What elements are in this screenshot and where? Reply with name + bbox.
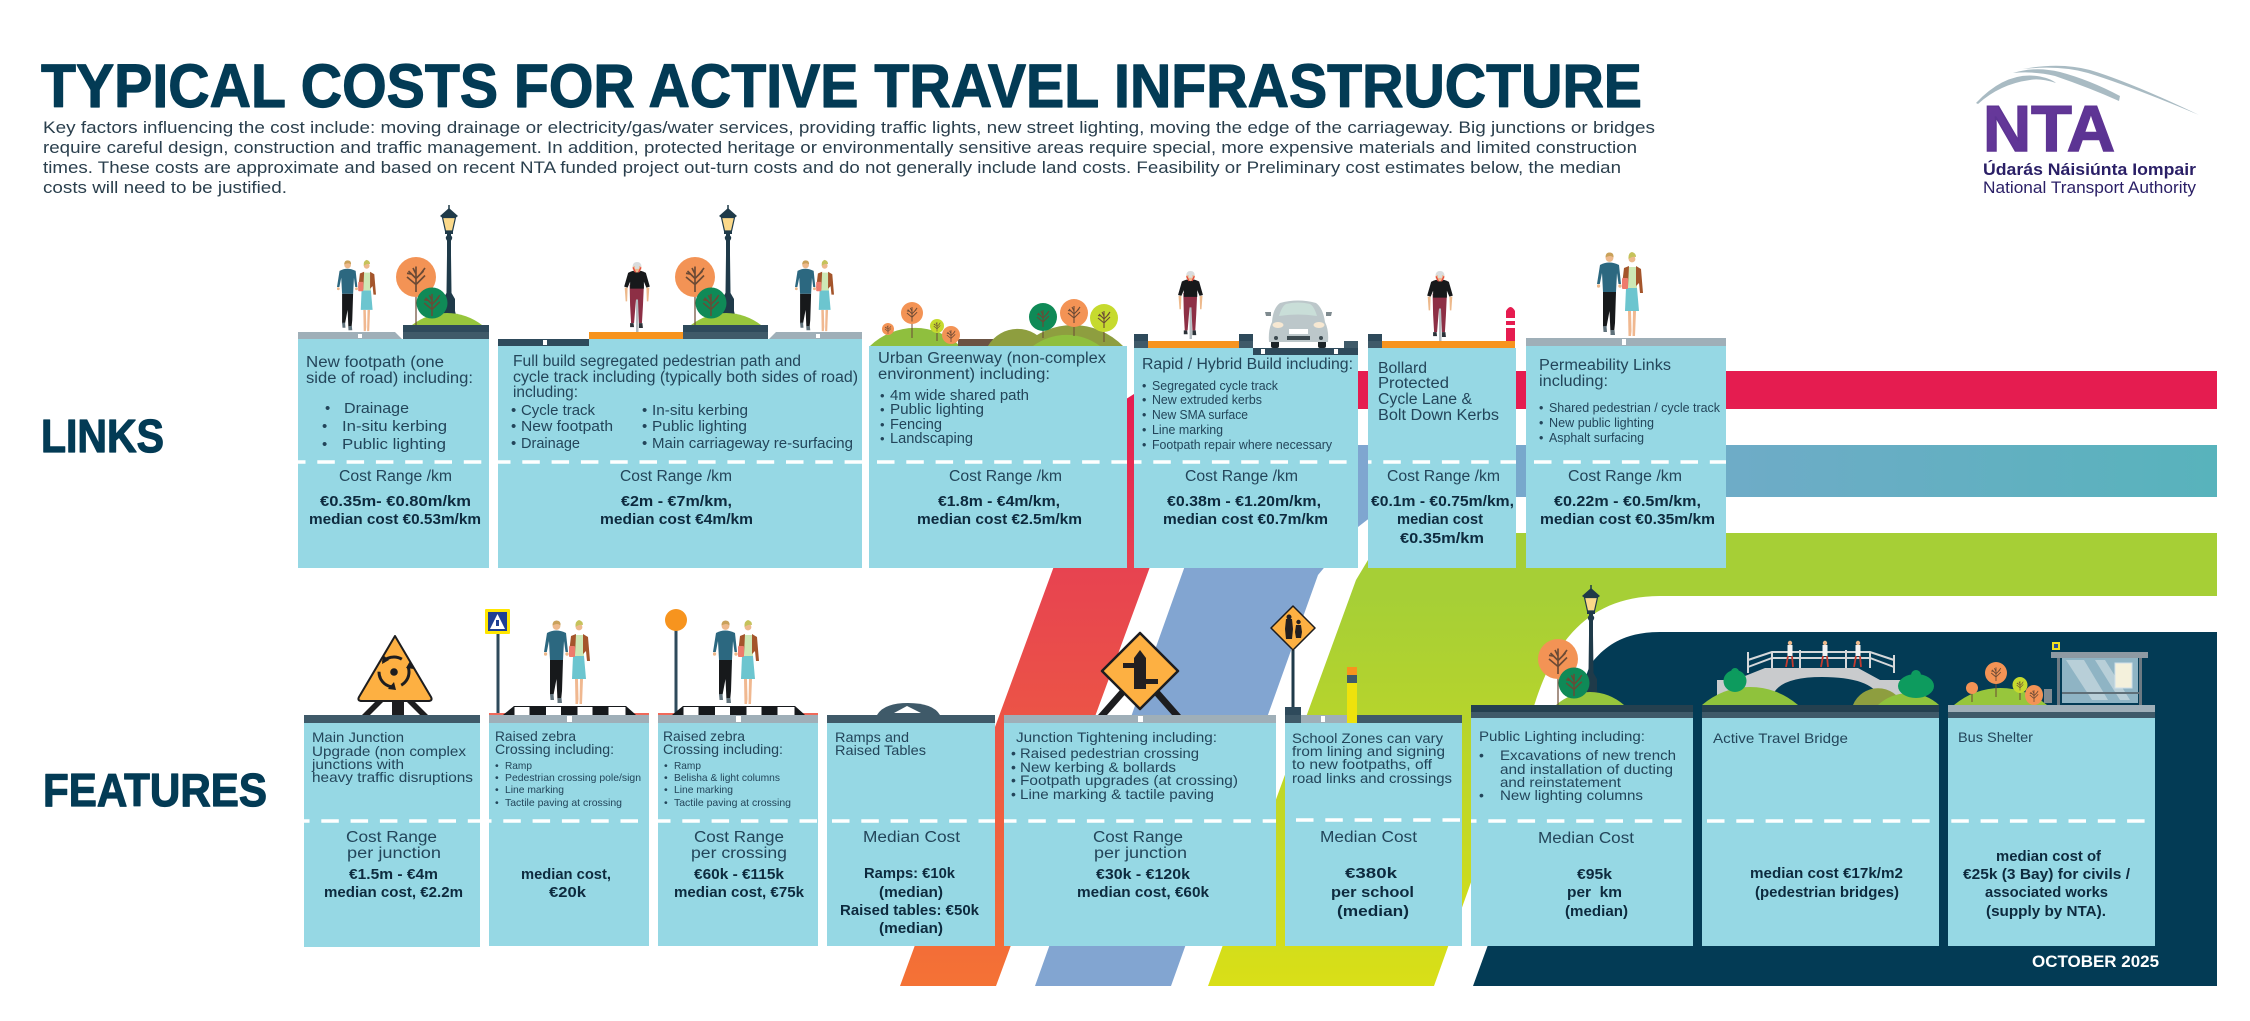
description: Bollard [1378, 360, 1427, 377]
description: Crossing including: [495, 741, 614, 757]
description: Line marking & tactile paving [1020, 786, 1214, 802]
cost: (supply by NTA). [1986, 903, 2106, 920]
description: In-situ kerbing [652, 402, 748, 419]
description: Ramp [505, 760, 532, 772]
cost [1963, 848, 2131, 920]
road surface [298, 325, 489, 339]
description: junctions with [311, 756, 404, 772]
cost: Cost Range /km [1387, 468, 1500, 485]
intro text block: Key factors influencing the cost include: moving drainage or electricity/gas/water services, providing traffic lights, new street lighting, moving the edge of the carriageway. Big junctions or bridges [43, 119, 1655, 137]
description: Full build segregated pedestrian path and [513, 353, 801, 370]
description: road links and crossings [1292, 770, 1452, 786]
cost: per school [1331, 884, 1414, 901]
description: Public Lighting including: [1479, 728, 1645, 744]
cost: (median) [879, 920, 943, 937]
cost [1540, 468, 1715, 528]
description [306, 354, 473, 453]
icon: side-road warning sign [1098, 633, 1181, 715]
cost: €2m - €7m/km, [621, 493, 732, 510]
panel: ramps and raised tables [827, 703, 995, 946]
cost: median cost, [521, 866, 611, 883]
road surface [1004, 715, 1276, 723]
cost: Median Cost [1538, 830, 1635, 847]
description: • [495, 772, 499, 784]
description: 4m wide shared path [890, 387, 1029, 404]
description: • [1142, 423, 1146, 437]
panel: junction tightening [1004, 633, 1276, 946]
logo: NTA [1976, 66, 2199, 197]
description: Drainage [521, 435, 580, 452]
description: Shared pedestrian / cycle track [1549, 401, 1721, 415]
description: In-situ kerbing [342, 418, 447, 435]
description: School Zones can vary [1292, 730, 1443, 746]
panel: permeability links [1526, 252, 1726, 568]
description: New footpath (one [306, 354, 444, 371]
description: Landscaping [890, 430, 973, 447]
description: from lining and signing [1292, 743, 1445, 759]
description: Footpath repair where necessary [1152, 438, 1333, 452]
description: Line marking [674, 784, 733, 796]
icon: zebra crossing [658, 706, 818, 715]
cost: associated works [1985, 884, 2108, 901]
panel body [1368, 348, 1516, 568]
description: • [1011, 759, 1016, 775]
cost: €1.8m - €4m/km, [938, 493, 1060, 510]
description: Ramps and [835, 729, 909, 745]
description: • [664, 760, 668, 772]
panel body [869, 346, 1127, 568]
cost: €25k (3 Bay) for civils / [1963, 866, 2131, 883]
road surface [1134, 334, 1358, 355]
description: New kerbing & bollards [1020, 759, 1176, 775]
icon: hill and trees [396, 257, 482, 325]
cost: median cost [1397, 511, 1483, 528]
description: Cycle track [521, 402, 595, 419]
description: • [325, 400, 330, 417]
panel: raised zebra crossing (belisha) [658, 609, 818, 946]
road surface [1471, 705, 1693, 718]
cost [1077, 829, 1210, 901]
description: • [642, 402, 647, 419]
icon: school warning sign [1271, 606, 1315, 707]
cost: €60k - €115k [694, 866, 785, 883]
cost: median cost €4m/km [600, 511, 753, 528]
description: Public lighting [342, 436, 446, 453]
cost [1371, 468, 1514, 547]
cost: (median) [1565, 903, 1628, 920]
panel body [827, 723, 995, 946]
description: Belisha & light columns [674, 772, 780, 784]
cost: Cost Range [346, 829, 437, 846]
panel body [1948, 718, 2155, 946]
intro text block: require careful design, construction and traffic management. In addition, protected heritage or environmentally sensitive areas require special, more expensive materials and limited construction [43, 139, 1637, 157]
description: • [495, 784, 499, 796]
description: New lighting columns [1500, 787, 1643, 803]
heading: LINKS: LINKS [41, 410, 164, 462]
background road band: red to orange [900, 371, 2217, 986]
cost: (pedestrian bridges) [1755, 884, 1899, 901]
panel: rapid / hybrid build [1134, 271, 1358, 568]
description: New footpath [521, 418, 613, 435]
cost [1163, 468, 1328, 528]
description: • [511, 435, 516, 452]
description: • [495, 797, 499, 809]
panel: urban greenway [869, 299, 1127, 568]
description: • [1479, 747, 1484, 763]
road surface [1285, 707, 1462, 723]
description: • [495, 760, 499, 772]
background road band: green to yellow [1208, 533, 2217, 986]
cost: median cost, €75k [674, 884, 805, 901]
cost: €0.1m - €0.75m/km, [1371, 493, 1514, 510]
icon: pedestrians [795, 260, 834, 331]
icon: footbridge [1702, 641, 1939, 705]
cost [521, 866, 611, 901]
description: • [1539, 401, 1543, 415]
icon: cyclist [624, 262, 650, 332]
cost: €0.35m- €0.80m/km [320, 493, 471, 510]
cost: median cost, €60k [1077, 884, 1210, 901]
description: Permeability Links [1539, 357, 1671, 374]
panel body [298, 339, 489, 568]
icon: bus shelter [2044, 642, 2148, 705]
icon: lamp post [1582, 585, 1600, 695]
cost [324, 829, 463, 901]
cost: median cost €0.7m/km [1163, 511, 1328, 528]
cost: per km [1567, 884, 1622, 901]
intro text block: costs will need to be justified. [43, 179, 287, 197]
description: Cycle Lane & [1378, 391, 1473, 408]
panel body [489, 723, 649, 946]
cost: median cost €17k/m2 [1750, 865, 1903, 882]
description: Junction Tightening including: [1016, 729, 1217, 745]
cost: €30k - €120k [1096, 866, 1191, 883]
description [1142, 356, 1353, 452]
road surface [1526, 338, 1726, 346]
description: • [322, 436, 327, 453]
cost: Cost Range /km [620, 468, 732, 485]
cost: €0.35m/km [1400, 530, 1484, 547]
description: Crossing including: [663, 741, 783, 757]
panel: raised zebra crossing (pole sign) [485, 609, 649, 946]
cost: €20k [549, 884, 587, 901]
cost: (median) [879, 884, 943, 901]
panel body [1526, 346, 1726, 568]
panel: bus shelter [1948, 642, 2155, 946]
intro text block [43, 119, 1655, 197]
panel body [1004, 723, 1276, 946]
description: New SMA surface [1152, 408, 1248, 422]
description: Main Junction [312, 729, 404, 745]
icon: hill and trees [1538, 639, 1624, 705]
description: Urban Greenway (non-complex [878, 350, 1106, 367]
road surface [1368, 334, 1515, 348]
panel body [498, 339, 862, 568]
panel: new footpath [298, 205, 489, 568]
icon: raised table hump [877, 703, 940, 715]
cost: €1.5m - €4m [349, 866, 438, 883]
cost: Cost Range [694, 829, 784, 846]
icon: pedestrians [337, 260, 376, 331]
description: • [664, 784, 668, 796]
description: Asphalt surfacing [1549, 431, 1644, 445]
description: heavy traffic disruptions [312, 769, 473, 785]
cost: median cost, €2.2m [324, 884, 463, 901]
cost [1320, 829, 1418, 920]
cost: per crossing [691, 845, 787, 862]
panel body [1471, 718, 1693, 946]
description: • [511, 402, 516, 419]
icon: cyclist [1427, 271, 1453, 341]
panel body [1702, 718, 1939, 946]
cost [309, 468, 481, 528]
road surface [1948, 705, 2155, 718]
description: • [1142, 379, 1146, 393]
description: Raised pedestrian crossing [1020, 745, 1199, 761]
cost: (median) [1337, 903, 1409, 920]
cost: €0.22m - €0.5m/km, [1554, 493, 1701, 510]
description [1378, 360, 1499, 424]
icon: cyclist [1178, 271, 1203, 339]
description: Segregated cycle track [1152, 379, 1279, 393]
description: including: [513, 384, 578, 401]
cost [1538, 830, 1635, 920]
icon: pedestrians [544, 620, 590, 704]
description [878, 350, 1106, 447]
panel body [658, 723, 818, 946]
description [835, 729, 926, 758]
description: • [880, 417, 885, 432]
cost: Cost Range /km [1568, 468, 1682, 485]
description: cycle track including (typically both sides of road) [513, 369, 858, 386]
description: • [322, 418, 327, 435]
description: • [642, 418, 647, 435]
logo letters: NTA [1983, 92, 2115, 165]
cost: €95k [1577, 866, 1613, 883]
icon: bollard post [1347, 667, 1357, 723]
description: environment) including: [878, 366, 1050, 383]
description [663, 728, 791, 809]
cost [600, 468, 753, 528]
intro text block: times. These costs are approximate and based on recent NTA funded project out-turn costs and do not generally include land costs. Feasibility or Preliminary cost estimates below, the median [43, 159, 1621, 177]
description: • [1539, 416, 1543, 430]
icon: crossing sign on pole [485, 609, 510, 715]
panel: active travel bridge [1702, 641, 1939, 946]
cost: per junction [347, 845, 441, 862]
description: Raised zebra [663, 728, 745, 744]
description: Fencing [890, 416, 942, 433]
cost: Raised tables: €50k [840, 902, 980, 919]
description: Line marking [505, 784, 564, 796]
description: Public lighting [890, 401, 984, 418]
icon: hill and trees [675, 257, 761, 325]
icon: bollard [1506, 307, 1515, 341]
description: • [1142, 408, 1146, 422]
description [1539, 357, 1721, 445]
icon: belisha beacon [665, 609, 687, 715]
panel body [304, 723, 480, 947]
description: • [664, 797, 668, 809]
description: and installation of ducting [1500, 761, 1673, 777]
description: Tactile paving at crossing [505, 797, 622, 809]
icon: hills and trees [870, 299, 1123, 346]
description: Raised Tables [835, 742, 926, 758]
road surface [827, 715, 995, 723]
panel body [1285, 723, 1462, 946]
cost: Median Cost [1320, 829, 1418, 846]
description: • [1142, 438, 1146, 452]
logo Irish name: Údarás Náisiúnta Iompair [1983, 160, 2197, 179]
date: OCTOBER 2025 [2032, 952, 2159, 971]
description: New public lighting [1549, 416, 1654, 430]
cost: median cost €0.53m/km [309, 511, 481, 528]
cost: median cost €0.35m/km [1540, 511, 1715, 528]
panel: bollard protected cycle lane [1368, 271, 1516, 568]
description: to new footpaths, off [1292, 756, 1432, 772]
road surface [498, 325, 862, 346]
icon: roundabout warning sign [357, 636, 433, 715]
description: • [664, 772, 668, 784]
description: Ramp [674, 760, 701, 772]
icon: lamp post [440, 205, 458, 315]
cost [1750, 865, 1903, 901]
cost: €380k [1345, 865, 1398, 882]
description: Drainage [344, 400, 409, 417]
description: Active Travel Bridge [1713, 730, 1848, 746]
background road band: blue to teal [1035, 445, 2217, 986]
cost [917, 468, 1082, 528]
cost: median cost €2.5m/km [917, 511, 1082, 528]
description: side of road) including: [306, 370, 473, 387]
description: • [1539, 431, 1543, 445]
cost: per junction [1094, 845, 1187, 862]
description: Rapid / Hybrid Build including: [1142, 356, 1353, 373]
description: • [1479, 787, 1484, 803]
description: New extruded kerbs [1152, 393, 1262, 407]
description: Bus Shelter [1958, 729, 2033, 745]
icon: pedestrians [713, 620, 759, 704]
cost [674, 829, 805, 901]
logo English name: National Transport Authority [1983, 179, 2197, 197]
cost: Cost Range /km [949, 468, 1062, 485]
description: including: [1539, 373, 1608, 390]
panel: school zones [1271, 606, 1462, 946]
description: Bolt Down Kerbs [1378, 407, 1499, 424]
cost: Cost Range /km [339, 468, 452, 485]
panel: full build segregated path [498, 205, 862, 568]
title: TYPICAL COSTS FOR ACTIVE TRAVEL INFRASTRUCTURE [41, 52, 1642, 120]
description: Protected [1378, 375, 1449, 392]
panel: public lighting [1471, 585, 1693, 946]
cost: €0.38m - €1.20m/km, [1167, 493, 1321, 510]
description [511, 353, 858, 452]
description [1479, 728, 1676, 803]
icon: pedestrians [1597, 252, 1643, 336]
description [1011, 729, 1238, 802]
description: • [880, 402, 885, 417]
description: • [1142, 393, 1146, 407]
description: Raised zebra [495, 728, 576, 744]
icon: hill and trees [1954, 662, 2047, 705]
description: Line marking [1152, 423, 1223, 437]
cost: Cost Range /km [1185, 468, 1298, 485]
description: and reinstatement [1500, 774, 1621, 790]
road surface [489, 715, 649, 723]
panel body [1134, 348, 1358, 568]
road surface [1702, 705, 1939, 718]
icon: zebra crossing [489, 706, 649, 715]
background road band: navy [1473, 632, 2217, 986]
cost: Ramps: €10k [864, 865, 956, 882]
description: Main carriageway re-surfacing [652, 435, 853, 452]
panel: main junction upgrade [304, 636, 480, 947]
description: • [1011, 745, 1016, 761]
description: • [880, 431, 885, 446]
description: Pedestrian crossing pole/sign [505, 772, 641, 784]
heading: FEATURES: FEATURES [43, 764, 267, 816]
cost: Median Cost [863, 829, 961, 846]
description: Upgrade (non complex [312, 743, 466, 759]
cost [840, 829, 980, 937]
description: • [880, 388, 885, 403]
icon: lamp post [719, 205, 737, 315]
road surface [304, 715, 480, 723]
cost: median cost of [1996, 848, 2102, 865]
description [1292, 730, 1452, 786]
description: Excavations of new trench [1500, 747, 1676, 763]
description [495, 728, 641, 809]
description: Footpath upgrades (at crossing) [1020, 772, 1238, 788]
icon: car [1265, 300, 1332, 348]
description: • [642, 435, 647, 452]
description: Tactile paving at crossing [674, 797, 791, 809]
description: • [1011, 772, 1016, 788]
description [311, 729, 473, 785]
logo swoosh [1976, 66, 2199, 115]
description: • [1011, 786, 1016, 802]
description: Public lighting [652, 418, 747, 435]
cost: Cost Range [1093, 829, 1183, 846]
description: • [511, 418, 516, 435]
road surface [658, 715, 818, 723]
